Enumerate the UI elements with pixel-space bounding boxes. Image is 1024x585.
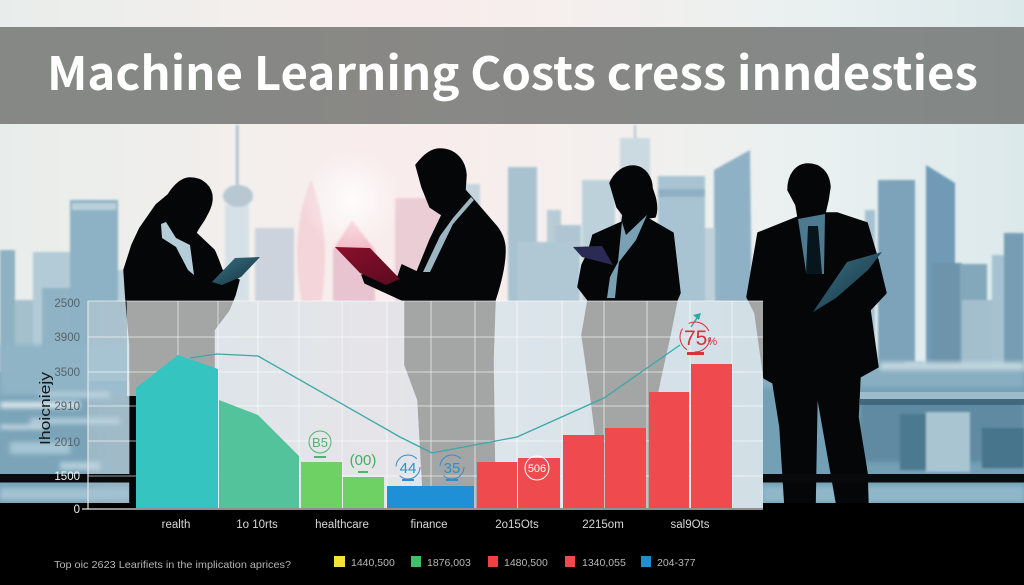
- grid lines: [88, 301, 763, 508]
- silhouette: woman with tablet, left: [124, 178, 260, 508]
- trend arrow: [691, 313, 701, 327]
- shirt: [423, 197, 474, 272]
- title band: [0, 27, 1024, 124]
- area: teal: [136, 355, 218, 508]
- legend: blue: [641, 556, 696, 569]
- legend: blue: 204-377: [657, 557, 696, 569]
- panel overlay: [88, 301, 763, 508]
- badge: green 1: [309, 431, 331, 458]
- bottom black band: [0, 503, 1024, 585]
- silhouette: woman with tablet, centre right: [573, 166, 680, 508]
- legend: red 1: [488, 556, 548, 569]
- legend: [334, 556, 696, 569]
- x axis labels: [162, 519, 710, 531]
- y axis tick labels: 3500: [54, 367, 80, 379]
- y axis title: Ihoicniejy: [37, 371, 54, 445]
- title: Machine Learning Costs cress inndesties: [47, 38, 978, 104]
- trend line: [190, 345, 680, 453]
- y axis tick labels: 2910: [54, 401, 80, 413]
- x axis labels: finance: [410, 519, 448, 531]
- area: green: [219, 400, 299, 508]
- legend: green: 1876,003: [427, 557, 471, 569]
- badge: blue 35: [440, 455, 464, 481]
- legend: red 1: 1480,500: [504, 557, 548, 569]
- badge: blue 44: 44: [400, 460, 416, 477]
- shirt: [798, 214, 825, 274]
- tablet: [573, 246, 613, 265]
- badge: 75%: [680, 322, 717, 355]
- y axis tick labels: 0: [74, 504, 80, 516]
- badge: green 2: (00): [350, 452, 376, 469]
- silhouette: man with red tablet, centre: [335, 149, 505, 508]
- badge: blue 44: [396, 455, 420, 481]
- blue bar: [387, 486, 474, 508]
- green bars: [301, 462, 384, 508]
- x axis labels: healthcare: [315, 519, 369, 531]
- background: sun glow: [302, 150, 402, 250]
- chart panel: [0, 298, 1024, 531]
- badge: 506: [525, 456, 549, 480]
- x axis labels: 2o15Ots: [495, 519, 539, 531]
- x axis labels: 2215om: [582, 519, 624, 531]
- background: lower city and river: [0, 301, 1024, 508]
- y axis tick labels: 2500: [54, 298, 80, 310]
- tablet: [335, 247, 400, 285]
- y axis tick labels: 1500: [54, 471, 80, 483]
- y axis tick labels: 3900: [54, 332, 80, 344]
- background: city skyline: [0, 125, 1024, 422]
- legend: yellow: [334, 556, 395, 569]
- tie: [806, 226, 822, 274]
- badge: 75%: 75%: [684, 327, 717, 350]
- legend: green: [411, 556, 471, 569]
- badge: 506: 506: [528, 463, 546, 475]
- x axis labels: 1o 10rts: [236, 519, 278, 531]
- shirt: [607, 215, 647, 298]
- shirt collar: [161, 222, 194, 275]
- x axis labels: realth: [162, 519, 190, 531]
- red bars: [477, 364, 732, 508]
- y axis tick labels: [54, 298, 80, 516]
- tablet: [813, 252, 882, 312]
- badge: blue 35: 35: [444, 460, 460, 477]
- railing bars: [0, 474, 1024, 482]
- footer note: Top oic 2623 Learifiets in the implication aprices?: [54, 559, 291, 571]
- tablet: [212, 257, 260, 285]
- y axis: [82, 301, 763, 509]
- legend: yellow: 1440,500: [351, 557, 395, 569]
- badge: green 1: B5: [312, 435, 328, 450]
- silhouette: man with tablet, right: [747, 164, 886, 506]
- legend: red 2: [565, 556, 626, 569]
- legend: red 2: 1340,055: [582, 557, 626, 569]
- x axis labels: sal9Ots: [670, 519, 710, 531]
- y axis tick labels: 2010: [54, 437, 80, 449]
